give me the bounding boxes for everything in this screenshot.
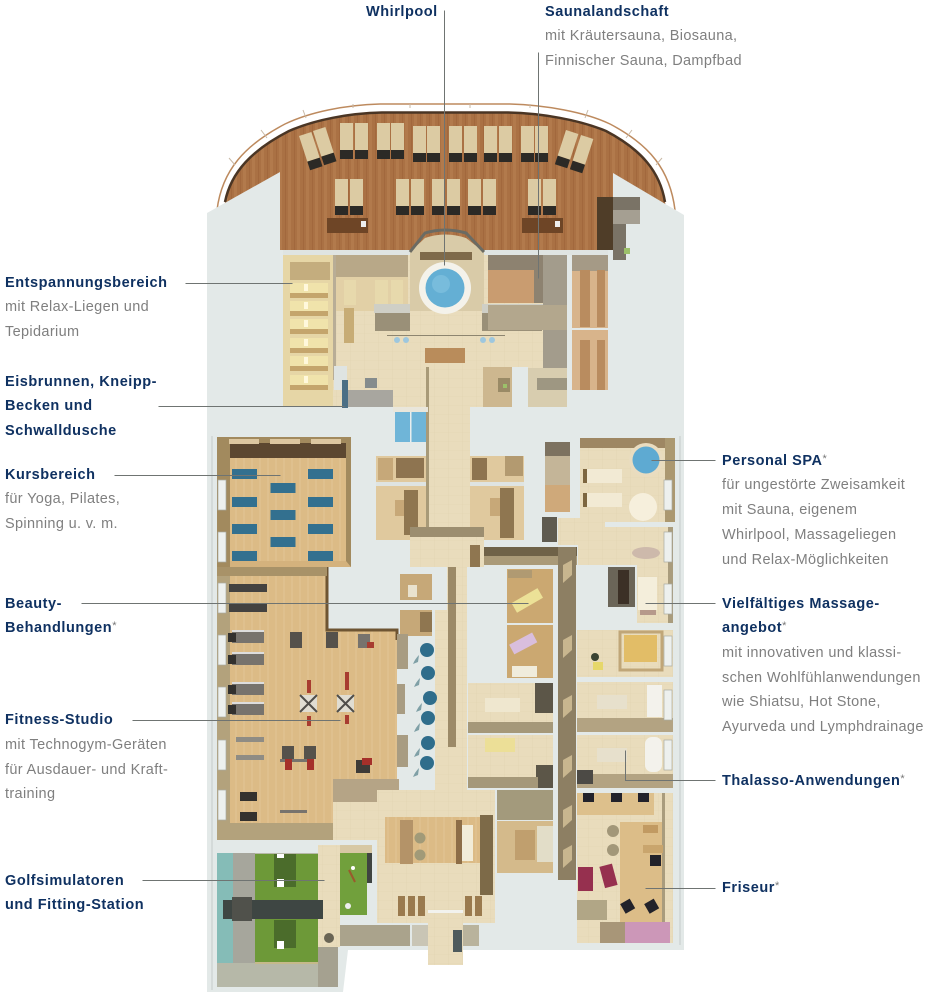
label: Personal SPA: und Relax-Möglichkeiten <box>722 552 889 568</box>
label: Massageangebot: Ayurveda und Lymphdrainage <box>722 719 924 735</box>
label: Entspannungsbereich: Tepidarium <box>5 324 79 340</box>
relax room <box>283 255 336 407</box>
label: Personal SPA: für ungestörte Zweisamkeit <box>722 477 905 493</box>
label: Personal SPA <box>722 453 905 568</box>
label: Massageangebot: Vielfältiges Massage- <box>722 596 880 612</box>
floor plate <box>207 172 684 992</box>
deck plan <box>207 104 684 992</box>
label: Fitness-Studio: training <box>5 786 55 802</box>
label: Massageangebot: angebot <box>722 620 782 636</box>
label: Fitness-Studio <box>5 712 168 802</box>
label: Fitness-Studio: mit Technogym-Geräten <box>5 737 167 753</box>
label: Friseur: * <box>775 880 780 892</box>
lower grey band <box>340 925 479 946</box>
label: Entspannungsbereich: Entspannungsbereich <box>5 275 168 291</box>
strength stations <box>282 632 374 773</box>
label: Eisbrunnen: Becken und <box>5 398 93 414</box>
corridor with armchairs <box>413 567 467 802</box>
label: Eisbrunnen: Schwalldusche <box>5 423 117 439</box>
massage suite east <box>578 527 673 623</box>
label: Personal SPA: Whirlpool, Massageliegen <box>722 527 896 543</box>
putting area <box>318 845 372 987</box>
salon chairs <box>578 793 663 914</box>
yellow bed room <box>577 630 673 677</box>
small wc rooms <box>400 574 432 636</box>
entrance steps <box>428 910 463 965</box>
label: Kursbereich: Kursbereich <box>5 467 96 483</box>
label: Fitness-Studio: Fitness-Studio <box>5 712 113 728</box>
east windows <box>664 480 672 926</box>
west windows <box>218 480 226 820</box>
label: Beauty-Behandlungen: * <box>112 620 117 632</box>
label: Thalasso: Thalasso-Anwendungen <box>722 773 900 789</box>
salon <box>577 793 673 943</box>
massage rooms lower <box>468 683 553 788</box>
label: Eisbrunnen: Eisbrunnen, Kneipp- <box>5 374 157 390</box>
lobby <box>410 527 484 567</box>
side cabins <box>542 442 605 545</box>
golf simulators <box>217 853 323 987</box>
massage rooms centre <box>507 569 553 678</box>
label: Saunalandschaft: Saunalandschaft <box>545 4 669 20</box>
ice well <box>334 366 393 408</box>
fitness studio <box>217 567 397 840</box>
whirlpool alcove <box>410 230 484 314</box>
thalasso room <box>577 735 673 788</box>
label: Massageangebot: mit innovativen und klassi- <box>722 645 902 661</box>
reception <box>377 790 495 923</box>
label: Entspannungsbereich <box>5 275 168 340</box>
label: Kursbereich: Spinning u. v. m. <box>5 516 118 532</box>
label: Eisbrunnen <box>5 374 157 439</box>
label: Entspannungsbereich: mit Relax-Liegen und <box>5 299 149 315</box>
label: Friseur: Friseur <box>722 880 775 896</box>
label: Personal SPA: * <box>822 453 828 465</box>
pink rug <box>625 922 670 943</box>
sauna cabins <box>572 255 608 390</box>
east changing rooms <box>470 456 524 540</box>
label: Personal SPA: Personal SPA <box>722 453 822 469</box>
label: Massageangebot: wie Shiatsu, Hot Stone, <box>721 694 881 710</box>
label: Massageangebot: * <box>782 620 787 632</box>
leader lines <box>82 10 716 888</box>
counters <box>374 304 544 343</box>
personal spa suite <box>580 438 675 522</box>
label: Beauty-Behandlungen: Behandlungen <box>5 620 112 636</box>
central corridor <box>393 367 470 547</box>
label: Thalasso: * <box>900 773 905 785</box>
exercise mats <box>232 469 333 561</box>
tepidarium <box>336 255 408 343</box>
spa floor top <box>283 230 608 408</box>
label: Kursbereich: für Yoga, Pilates, <box>5 491 120 507</box>
label: Beauty-Behandlungen <box>5 596 117 636</box>
label: Kursbereich <box>5 467 120 532</box>
wooden mat <box>425 348 465 363</box>
label: Golfsimulatoren <box>5 873 144 913</box>
label: Golfsimulatoren: Golfsimulatoren <box>5 873 124 889</box>
label: Fitness-Studio: für Ausdauer- und Kraft- <box>5 762 168 778</box>
fitness side niches <box>333 634 408 840</box>
label: Saunalandschaft: mit Kräutersauna, Biosauna, <box>545 28 737 44</box>
treatment room with tub <box>577 682 673 732</box>
label: Massageangebot <box>721 596 924 735</box>
label: Whirlpool: Whirlpool <box>366 4 438 20</box>
sun deck with loungers <box>217 104 675 250</box>
course room <box>217 437 351 567</box>
cardio machines <box>228 584 307 821</box>
office room <box>497 790 553 873</box>
label: Personal SPA: mit Sauna, eigenem <box>722 502 857 518</box>
small cabins <box>483 367 567 407</box>
label: Saunalandschaft <box>545 4 742 69</box>
label: Golfsimulatoren: und Fitting-Station <box>5 897 144 913</box>
label: Beauty-Behandlungen: Beauty- <box>5 596 62 612</box>
service stairwell <box>597 197 640 260</box>
label: Saunalandschaft: Finnischer Sauna, Dampfbad <box>545 53 742 69</box>
sauna room <box>488 255 567 375</box>
west changing rooms <box>376 456 426 540</box>
label: Massageangebot: schen Wohlfühlanwendungen <box>722 670 921 686</box>
east corridor <box>484 547 577 880</box>
